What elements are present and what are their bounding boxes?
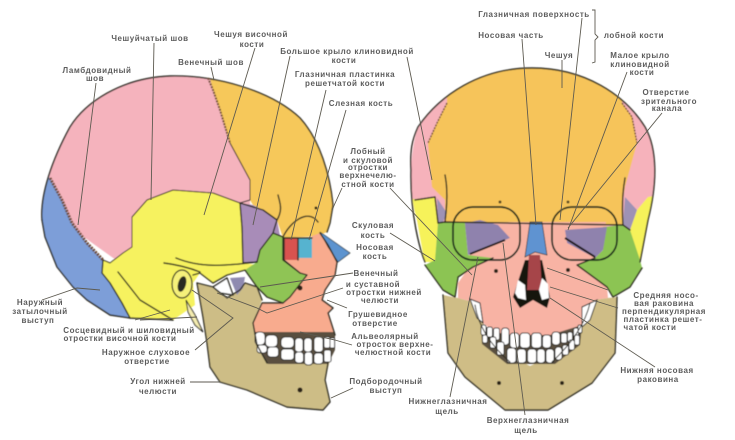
labels: lateral view top: Венечный шов bbox=[178, 58, 244, 67]
orbits purple bbox=[465, 220, 607, 258]
labels: frontal view bottom: Нижняя носовая bbox=[620, 366, 694, 375]
labels: lateral view top: кости bbox=[332, 56, 356, 65]
labels: lateral view bottom: Наружный bbox=[17, 298, 63, 307]
upper teeth lateral bbox=[255, 332, 334, 352]
labels: centre column: Лобный bbox=[350, 147, 386, 156]
labels: centre column: выступ bbox=[370, 386, 402, 395]
labels: frontal view bottom: Верхнеглазничная bbox=[487, 416, 569, 425]
labels: frontal view top: Чешуя bbox=[545, 51, 573, 60]
cranial vault fills bbox=[42, 76, 333, 318]
labels: frontal view bottom: щель bbox=[435, 407, 459, 416]
labels: centre column: Скуловая bbox=[352, 221, 394, 230]
labels: lateral view bottom: отверстие bbox=[124, 357, 170, 366]
labels: centre column: кость bbox=[363, 252, 387, 261]
labels: centre column: Подбородочный bbox=[349, 377, 423, 386]
labels: frontal view bottom: Средняя носо- bbox=[633, 291, 699, 300]
labels: centre column: челюстной кости bbox=[355, 348, 431, 357]
labels: lateral view top bbox=[63, 30, 414, 108]
teeth backing lateral bbox=[254, 332, 335, 364]
labels: lateral view bottom: отростки височной кости bbox=[64, 334, 176, 343]
labels: centre column: кость bbox=[361, 231, 385, 240]
labels: lateral view top: Слезная кость bbox=[329, 99, 393, 108]
labels: frontal view top: Носовая часть bbox=[478, 31, 544, 40]
labels: frontal view bottom: раковина bbox=[637, 375, 679, 384]
labels: frontal view top: Глазничная поверхность bbox=[478, 10, 590, 19]
labels: centre column: отросток верхне- bbox=[357, 340, 433, 349]
sphenoid greater wing bbox=[240, 203, 280, 263]
labels: lateral view top: кости bbox=[240, 40, 264, 49]
nasal bones front bbox=[525, 222, 547, 257]
skull outline and orbits front bbox=[411, 68, 655, 410]
lower teeth front bbox=[482, 335, 580, 363]
labels: frontal view top: кости bbox=[630, 68, 654, 77]
frontal bone bbox=[210, 79, 333, 238]
upper teeth front bbox=[481, 325, 582, 348]
labels: lateral view bottom: челюсти bbox=[139, 387, 177, 396]
labels: frontal view top: лобной кости bbox=[604, 31, 664, 40]
labels: lateral view top: Глазничная пластинка bbox=[295, 70, 395, 79]
zygomatic bone bbox=[245, 233, 307, 303]
labels: centre column: Носовая bbox=[356, 243, 394, 252]
labels: centre column: Альвеолярный bbox=[351, 332, 419, 341]
labels: centre column: отверстие bbox=[352, 319, 398, 328]
labels: centre column: Грушевидное bbox=[348, 310, 408, 319]
temporal bone bbox=[102, 190, 257, 320]
labels: lateral view bottom: затылочный bbox=[12, 307, 68, 316]
lower teeth lateral bbox=[257, 345, 331, 365]
labels: frontal view top: клиновидной bbox=[610, 60, 670, 69]
labels: frontal view top: Отверстие bbox=[643, 88, 689, 97]
labels: frontal view bottom bbox=[409, 291, 706, 435]
labels: frontal view top bbox=[478, 10, 697, 113]
labels: lateral view top: решетчатой кости bbox=[305, 79, 385, 88]
temporal bones front bbox=[405, 195, 660, 262]
labels: centre column: Венечный bbox=[354, 269, 398, 278]
labels: lateral view top: Ламбдовидный bbox=[63, 66, 131, 75]
labels: lateral view bottom: Наружное слуховое bbox=[102, 348, 190, 357]
labels: frontal view bottom: перпендикулярная bbox=[622, 307, 706, 316]
parietal bone bbox=[48, 76, 250, 260]
labels: lateral view top: шов bbox=[86, 74, 104, 83]
leader lines bbox=[42, 10, 662, 415]
labels: centre column bbox=[339, 147, 433, 395]
labels: lateral view top: Чешуйчатый шов bbox=[111, 34, 189, 43]
mandible bbox=[197, 283, 330, 410]
labels: centre column: отростки bbox=[348, 163, 388, 172]
labels: frontal view bottom: чатой кости bbox=[624, 323, 676, 332]
parietal sides bbox=[410, 97, 655, 228]
mouth openings bbox=[470, 299, 597, 327]
labels: lateral view bottom bbox=[12, 298, 195, 396]
maxilla front bbox=[458, 222, 608, 340]
labels: centre column: и суставной bbox=[346, 280, 400, 289]
labels: centre column: и скуловой bbox=[343, 156, 393, 165]
labels: frontal view bottom: Нижнеглазничная bbox=[409, 397, 487, 406]
labels: frontal view top: Малое крыло bbox=[610, 51, 670, 60]
labels: lateral view bottom: Сосцевидный и шиловидный bbox=[63, 326, 195, 335]
frontal bone front bbox=[428, 60, 637, 225]
labels: lateral view top: Чешуя височной bbox=[214, 30, 288, 39]
lateral skull bbox=[20, 60, 350, 410]
nasal bone bbox=[320, 232, 350, 262]
labels: lateral view top: Большое крыло клиновидной bbox=[280, 47, 414, 56]
frontal skull bbox=[400, 60, 670, 410]
piriform aperture bbox=[513, 255, 550, 308]
maxilla bbox=[253, 233, 337, 338]
zygomatic bones front bbox=[425, 222, 642, 297]
orbit ethmoid and lacrimal bbox=[284, 238, 312, 273]
mandible front bbox=[443, 295, 617, 410]
labels: centre column: челюсти bbox=[361, 296, 399, 305]
labels: frontal view top: канала bbox=[652, 104, 682, 113]
labels: frontal view top: зрительного bbox=[641, 97, 697, 106]
skull outline and sutures lateral bbox=[42, 76, 337, 410]
labels: centre column: отростки нижней bbox=[346, 288, 422, 297]
cranial fills front bbox=[410, 68, 655, 263]
labels: lateral view bottom: Угол нижней bbox=[130, 377, 186, 386]
labels: lateral view bottom: выступ bbox=[22, 316, 54, 325]
labels: centre column: верхнечелю- bbox=[339, 171, 397, 180]
labels: centre column: стной кости bbox=[341, 180, 395, 189]
occipital bone bbox=[42, 177, 129, 318]
auditory hole bbox=[213, 278, 233, 295]
sphenoid front bbox=[437, 197, 637, 230]
labels: frontal view bottom: пластинка решет- bbox=[624, 315, 702, 324]
teeth backing front bbox=[481, 325, 582, 364]
orbit floor backing bbox=[465, 222, 606, 262]
labels: frontal view bottom: щель bbox=[514, 426, 538, 435]
labels: frontal view bottom: вая раковина bbox=[634, 299, 694, 308]
